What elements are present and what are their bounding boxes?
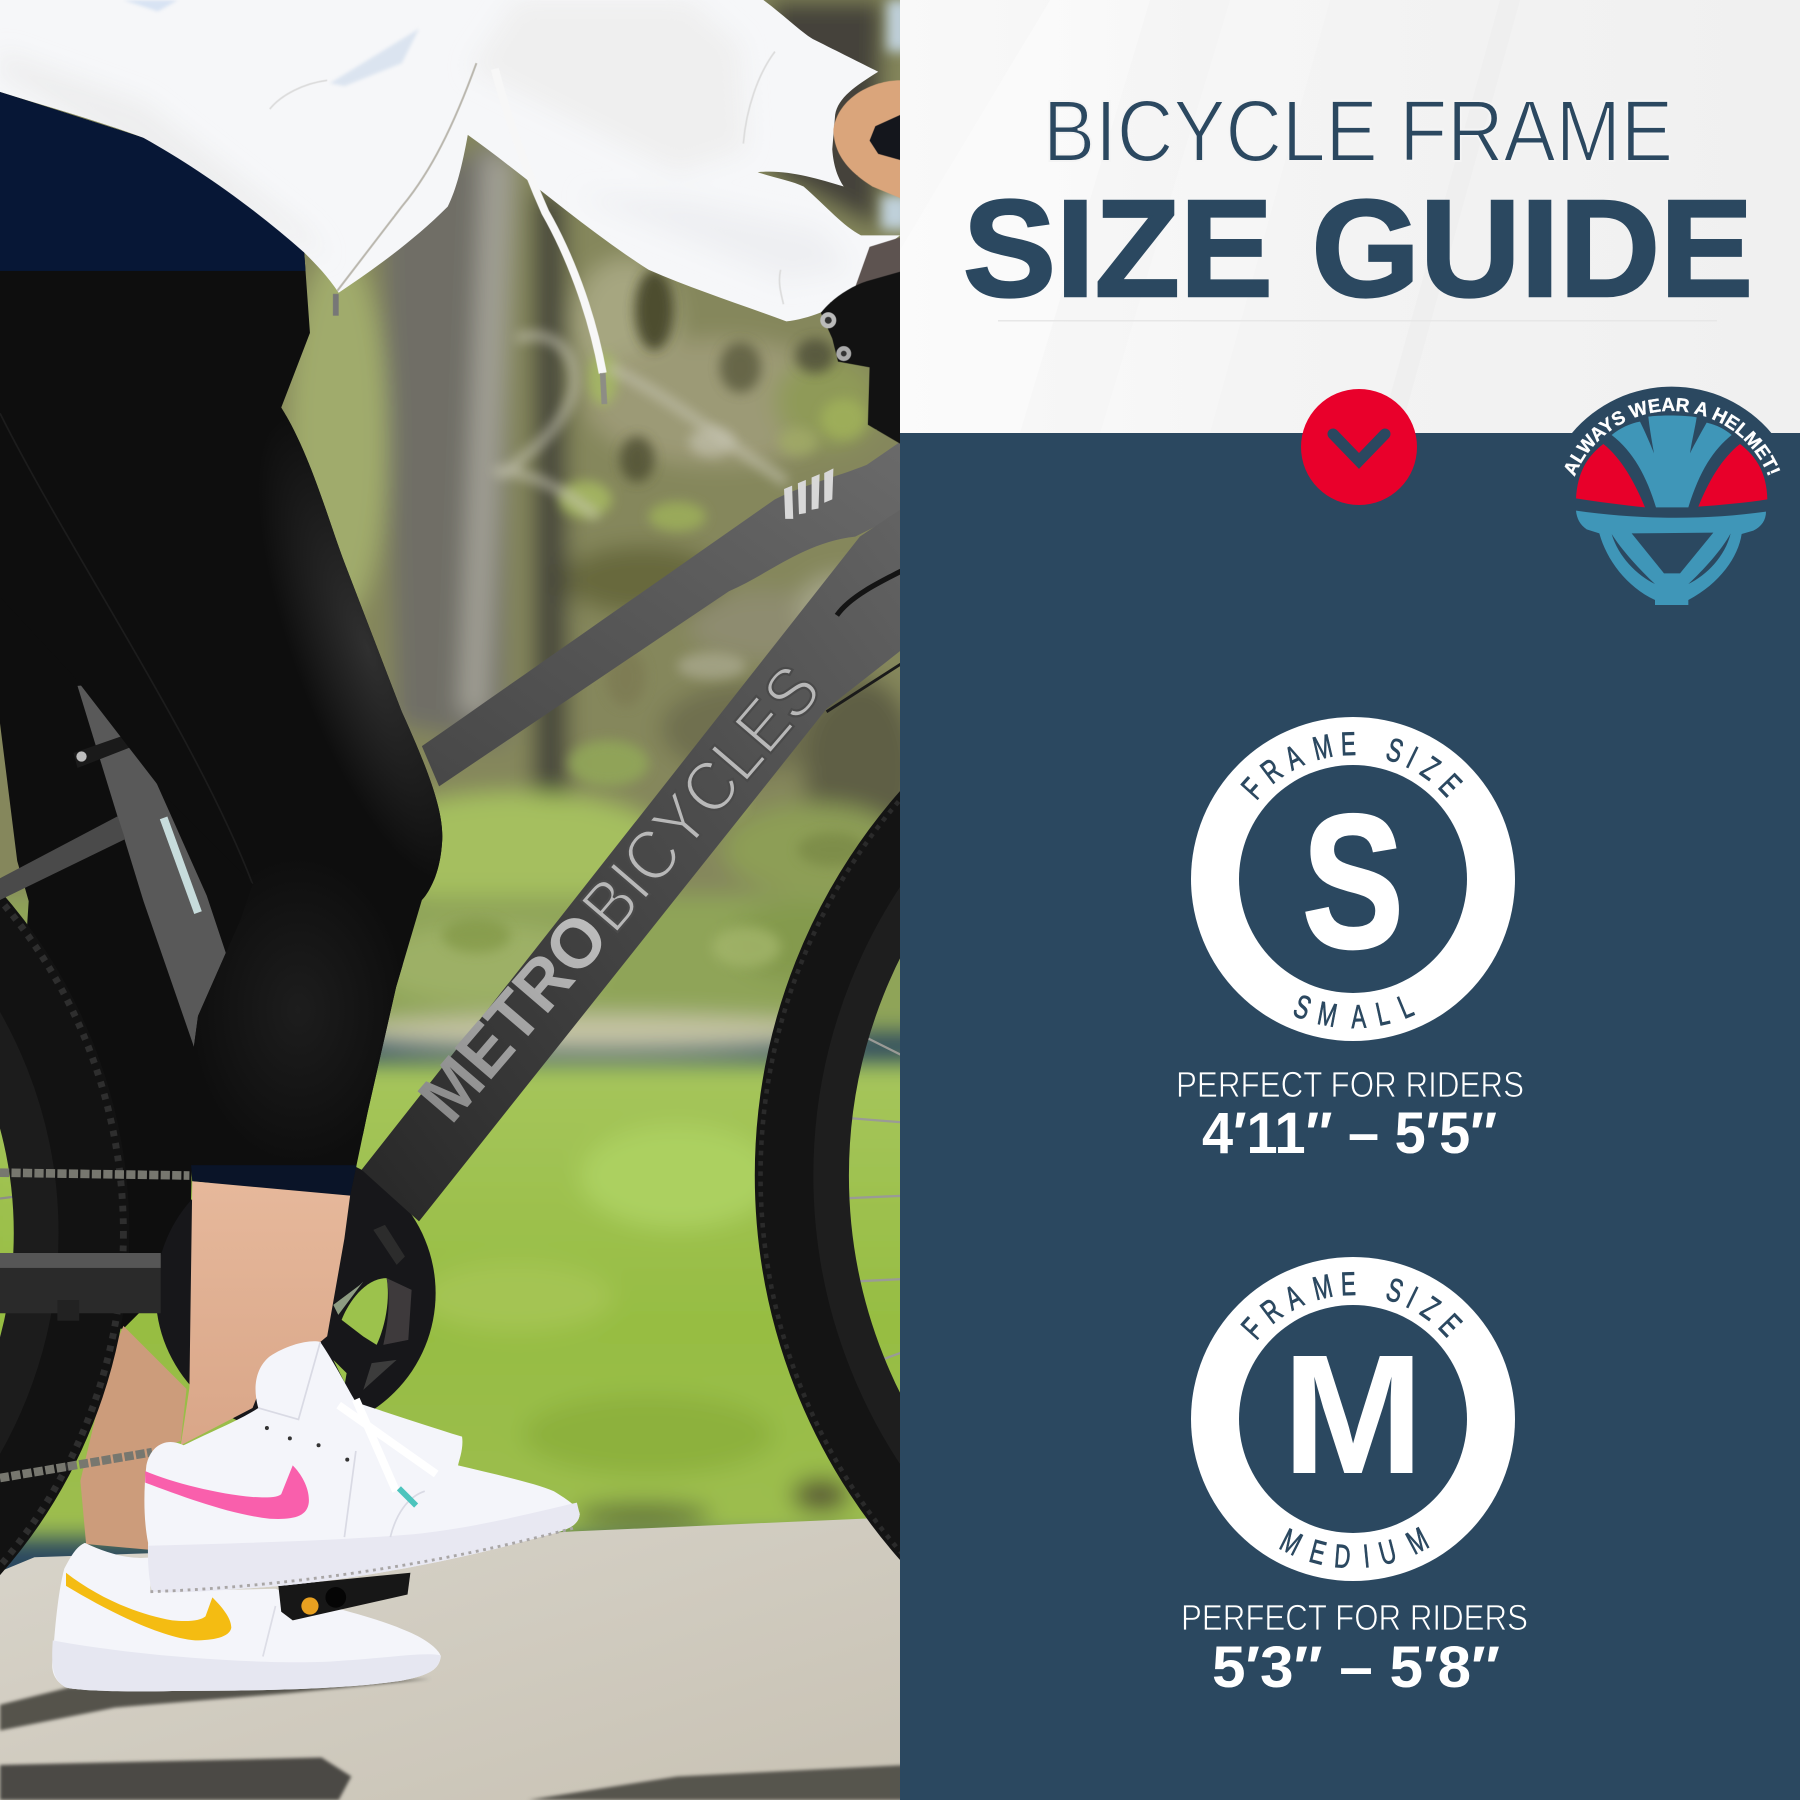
zipper pull bbox=[332, 294, 339, 316]
badge: frame size medium: R bbox=[1254, 1291, 1289, 1330]
badge: frame size small: R bbox=[1254, 751, 1289, 790]
badge: frame size small: A bbox=[1350, 997, 1367, 1035]
lace tip bbox=[399, 1488, 416, 1506]
blurred forest and grass background bbox=[0, 0, 947, 1538]
badge: frame size small: S bbox=[1382, 730, 1408, 770]
badge: frame size small: A bbox=[1279, 737, 1309, 777]
stem and head tube bbox=[820, 270, 907, 448]
seat tube bbox=[78, 686, 226, 1046]
front leg bbox=[0, 92, 442, 1196]
text: small rider height bbox=[1176, 1064, 1524, 1166]
badge: frame size medium: M bbox=[1400, 1520, 1434, 1561]
badge: frame size medium: F bbox=[1234, 1311, 1271, 1346]
icon: always wear a helmet badge: ALWAYS WEAR A HELMET! bbox=[1564, 398, 1780, 477]
badge: frame size medium: M bbox=[1309, 1266, 1336, 1307]
icon: red down chevron bbox=[1301, 389, 1417, 505]
bicycle chain bbox=[0, 1173, 189, 1478]
badge: frame size medium: M bbox=[1282, 1320, 1424, 1510]
concrete path bbox=[0, 1517, 907, 1800]
badge: frame size medium: I bbox=[1401, 1279, 1423, 1315]
lower hand bbox=[855, 235, 907, 287]
badge: frame size medium: A bbox=[1279, 1277, 1309, 1317]
badge: frame size medium: D bbox=[1333, 1537, 1352, 1575]
white hoodie bbox=[0, 0, 900, 321]
text: medium rider height: 5′3″ – 5′8″ bbox=[1212, 1635, 1500, 1700]
title: size guide: SIZE GUIDE bbox=[963, 172, 1753, 326]
photo: rider on a bicycle bbox=[0, 0, 900, 1800]
forest mottling bbox=[442, 270, 867, 968]
cable slot bbox=[837, 568, 907, 615]
frame logo: METRO bbox=[403, 898, 623, 1136]
zipper bbox=[336, 63, 476, 293]
badge: frame size small: E bbox=[1340, 724, 1356, 762]
badge: frame size medium: I bbox=[1361, 1537, 1371, 1575]
panel: navy body bbox=[900, 433, 1800, 1800]
frame logo bbox=[418, 667, 818, 1122]
badge: frame size medium: E bbox=[1432, 1306, 1469, 1343]
text: small rider height: PERFECT FOR RIDERS bbox=[1176, 1064, 1524, 1105]
seat stay clamp bbox=[74, 736, 129, 768]
text: medium rider height: PERFECT FOR RIDERS bbox=[1181, 1597, 1528, 1638]
rear wheel spokes bbox=[0, 1196, 12, 1337]
title: bicycle frame: BICYCLE FRAME bbox=[1043, 83, 1673, 180]
badge: frame size small: I bbox=[1401, 739, 1423, 775]
path shadows bbox=[0, 1679, 907, 1800]
badge: frame size small: Z bbox=[1414, 749, 1447, 787]
badge: frame size small: E bbox=[1432, 766, 1469, 803]
badge: frame size medium: U bbox=[1375, 1532, 1400, 1572]
badge: frame size small: S bbox=[1302, 776, 1404, 988]
chainring bbox=[156, 1153, 436, 1433]
badge: frame size small: M bbox=[1315, 994, 1340, 1034]
down tube bbox=[362, 505, 907, 1221]
yellow swoosh bbox=[66, 1573, 231, 1640]
panel: header background bbox=[900, 0, 1800, 433]
front ankle bbox=[181, 1181, 350, 1445]
badge: frame size small: F bbox=[1234, 771, 1271, 806]
upper hand bbox=[833, 80, 907, 201]
frame stripes bbox=[784, 468, 833, 519]
badge: frame size small: L bbox=[1392, 986, 1418, 1026]
icon: always wear a helmet badge bbox=[1564, 386, 1780, 605]
rear wheel bbox=[0, 897, 127, 1575]
badge: frame size medium: E bbox=[1306, 1532, 1330, 1572]
badge: frame size small: L bbox=[1372, 993, 1393, 1033]
badge: frame size medium: Z bbox=[1414, 1289, 1447, 1327]
badge: frame size small: S bbox=[1289, 987, 1316, 1027]
front wheel bbox=[754, 791, 900, 1560]
badge: frame size medium: E bbox=[1340, 1264, 1356, 1302]
text: small rider height: 4′11″ – 5′5″ bbox=[1202, 1101, 1497, 1166]
rear ankle bbox=[80, 1326, 187, 1550]
brake cable bbox=[827, 660, 907, 712]
rear leg bbox=[0, 597, 252, 1329]
chain stay bbox=[0, 1253, 161, 1321]
pink swoosh bbox=[145, 1465, 309, 1519]
text: medium rider height bbox=[1181, 1597, 1528, 1700]
badge: frame size small: M bbox=[1309, 726, 1336, 767]
handlebar grip bbox=[870, 112, 907, 162]
drawstring bbox=[495, 69, 604, 404]
badge: frame size small bbox=[1191, 717, 1515, 1041]
badge: frame size medium bbox=[1191, 1257, 1515, 1581]
badge: frame size medium: S bbox=[1382, 1270, 1408, 1310]
top tube bbox=[422, 442, 907, 786]
rear shoe bbox=[52, 1543, 441, 1691]
seat stay bbox=[0, 816, 125, 900]
frame logo: BICYCLES bbox=[566, 650, 835, 946]
pedal bbox=[278, 1573, 410, 1620]
front shoe bbox=[144, 1341, 580, 1592]
teal frame detail bbox=[164, 818, 198, 913]
badge: frame size medium: M bbox=[1275, 1521, 1308, 1563]
